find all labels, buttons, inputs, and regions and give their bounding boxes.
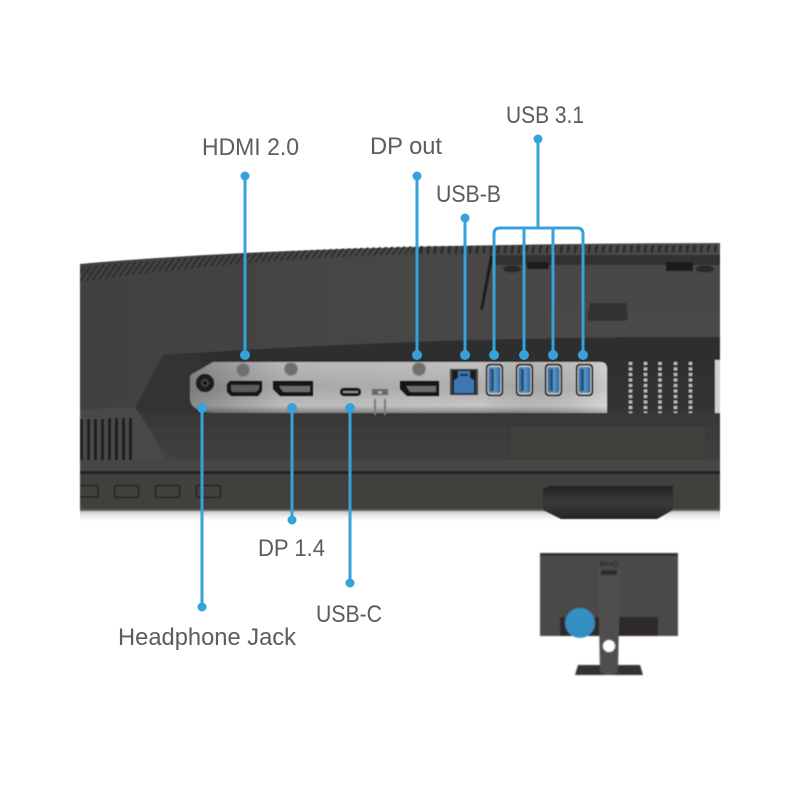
monitor rear close-up (80, 243, 720, 519)
lower bezel band (80, 460, 720, 511)
stand mount recess (480, 255, 720, 321)
lock slot (372, 389, 388, 415)
callout: USB-B (436, 181, 501, 360)
top edge vents (80, 245, 720, 282)
ports: USB 3.1 A (486, 364, 593, 396)
control buttons (80, 486, 220, 498)
callout: HDMI 2.0: HDMI 2.0 (202, 134, 299, 161)
screws (236, 362, 426, 376)
callout: DP out: DP out (370, 133, 442, 160)
callout: HDMI 2.0 (202, 134, 299, 360)
monitor body (80, 243, 720, 511)
callout: DP 1.4: DP 1.4 (258, 535, 325, 562)
left vent grille (80, 407, 165, 461)
shadow under monitor (80, 511, 720, 523)
thumbnail cable hole (603, 640, 615, 652)
thumbnail highlight circle (565, 608, 595, 638)
port: DP out (400, 381, 439, 396)
callout: USB 3.1: USB 3.1 (506, 102, 584, 129)
thumbnail base (575, 665, 643, 675)
callout: DP out (370, 133, 442, 360)
lower recess with port panel (135, 337, 720, 460)
port: DisplayPort 1.4 (273, 381, 313, 396)
port: USB-C (340, 388, 361, 396)
callout: DP 1.4 (258, 403, 325, 562)
joystick foot (543, 486, 673, 519)
port: USB-B (450, 369, 478, 395)
locator thumbnail: monitor back (540, 553, 678, 675)
callout: Headphone Jack: Headphone Jack (118, 624, 297, 651)
port: HDMI (227, 381, 262, 396)
right silver panel (715, 360, 720, 413)
port: headphone jack (196, 374, 214, 392)
thumbnail port recess (560, 617, 658, 636)
silver port panel (190, 362, 607, 413)
lower recess label plate (508, 426, 706, 459)
thumbnail stand (598, 569, 620, 675)
callout: USB 3.1 (489, 102, 588, 360)
callout: Headphone Jack (118, 403, 297, 651)
callout: USB-B: USB-B (436, 181, 501, 208)
thumbnail logo: BenQ (600, 561, 619, 568)
ports (196, 362, 593, 415)
thumbnail screen (540, 553, 678, 636)
callout: USB-C (316, 403, 382, 628)
right vent grille (630, 362, 690, 413)
callout: USB-C: USB-C (316, 601, 382, 628)
